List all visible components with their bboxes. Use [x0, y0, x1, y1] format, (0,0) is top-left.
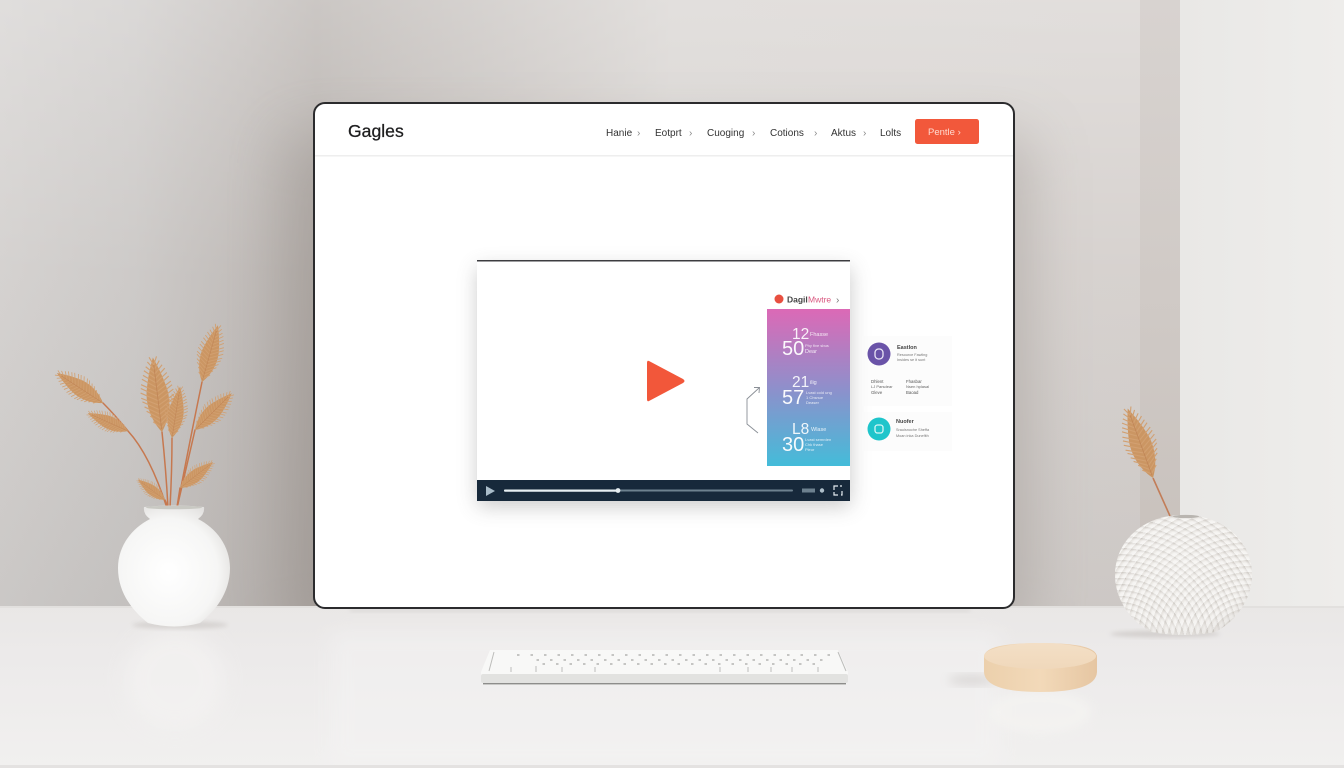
- side card: top: Insides se it sunt: [897, 358, 926, 362]
- navigation links: ›: [752, 128, 755, 139]
- grass stems: [103, 382, 202, 508]
- navigation links: ›: [863, 128, 866, 139]
- navigation links: ›: [814, 128, 817, 139]
- navigation links: ›: [689, 128, 692, 139]
- stat two: 21: [792, 374, 809, 391]
- navigation links: Lolts: [880, 128, 901, 139]
- side card: bottom: Sraulsnoche Sheffa: [896, 428, 930, 432]
- right vase with single plume: [1110, 402, 1252, 638]
- navigation links: Cotions: [770, 128, 804, 139]
- stat three: Pleur: [805, 447, 815, 452]
- stat three: Wlase: [811, 427, 826, 433]
- panel header: Dagil: [787, 294, 808, 304]
- data panel: [767, 288, 850, 466]
- stat two: 57: [782, 387, 804, 409]
- navigation links: Eotprt: [655, 128, 682, 139]
- side card: top: Baoad: [906, 390, 919, 395]
- stat two: 1 Chsnue: [806, 395, 824, 400]
- side card: bottom: Nuofer: [896, 419, 915, 425]
- navigation links: ›: [637, 128, 640, 139]
- button: [915, 119, 979, 144]
- table surface: [0, 606, 1344, 768]
- side card: bottom: Moan inka Dunefith: [896, 434, 929, 438]
- button: Pentle ›: [928, 127, 961, 138]
- vase body: [118, 506, 230, 626]
- side card: top: Nsen hplasal: [906, 384, 929, 389]
- side card: top: Gleve: [871, 390, 883, 395]
- stat two: [782, 374, 832, 409]
- logo: Gagles: [348, 121, 404, 141]
- left vase with dried grass: [50, 321, 240, 629]
- wooden puck: [948, 643, 1097, 692]
- panel header: Mwtre: [808, 294, 831, 304]
- stat three: [782, 421, 831, 456]
- side card: top: Eastlon: [897, 345, 918, 351]
- stat three: 30: [782, 434, 804, 456]
- panel header: [774, 294, 839, 306]
- stat one: 50: [782, 338, 804, 360]
- monitor screen: [314, 103, 1014, 608]
- stat one: Fhasse: [810, 332, 828, 338]
- side card: top: Resource Fawling: [897, 353, 927, 357]
- navigation links: Aktus: [831, 128, 856, 139]
- stat three: L8: [792, 421, 809, 438]
- stat one: [782, 326, 829, 360]
- navigation bar: [348, 119, 979, 144]
- panel header: ›: [836, 295, 839, 306]
- stat three: Chk thase: [805, 442, 824, 447]
- stat one: Dear: [805, 349, 817, 355]
- stat two: Deaser: [806, 400, 820, 405]
- navigation links: Cuoging: [707, 128, 744, 139]
- side card: top: Fhasbar: [906, 379, 922, 384]
- side card: top: [862, 336, 952, 406]
- video player: [477, 260, 850, 506]
- side card: bottom: [862, 412, 952, 451]
- icon: purple badge: [868, 342, 890, 366]
- keyboard: [481, 650, 848, 684]
- stat three: Lvast semrden: [805, 437, 831, 442]
- bracket arrow: [747, 388, 760, 433]
- side card: top: Dhlent: [871, 379, 884, 384]
- navigation links: [606, 128, 901, 139]
- icon: teal badge: [868, 418, 890, 440]
- play icon: [647, 361, 684, 401]
- side card: top: LJ Parsdear: [871, 384, 893, 389]
- grass plumes: [50, 321, 240, 506]
- stat two: ilig: [810, 380, 817, 386]
- control bar: [477, 480, 850, 501]
- navigation links: Hanie: [606, 128, 633, 139]
- stat one: Phy five sbus: [805, 343, 829, 348]
- stat two: Lvast cold ung: [806, 390, 832, 395]
- keys: [517, 655, 830, 664]
- stat one: 12: [792, 326, 809, 343]
